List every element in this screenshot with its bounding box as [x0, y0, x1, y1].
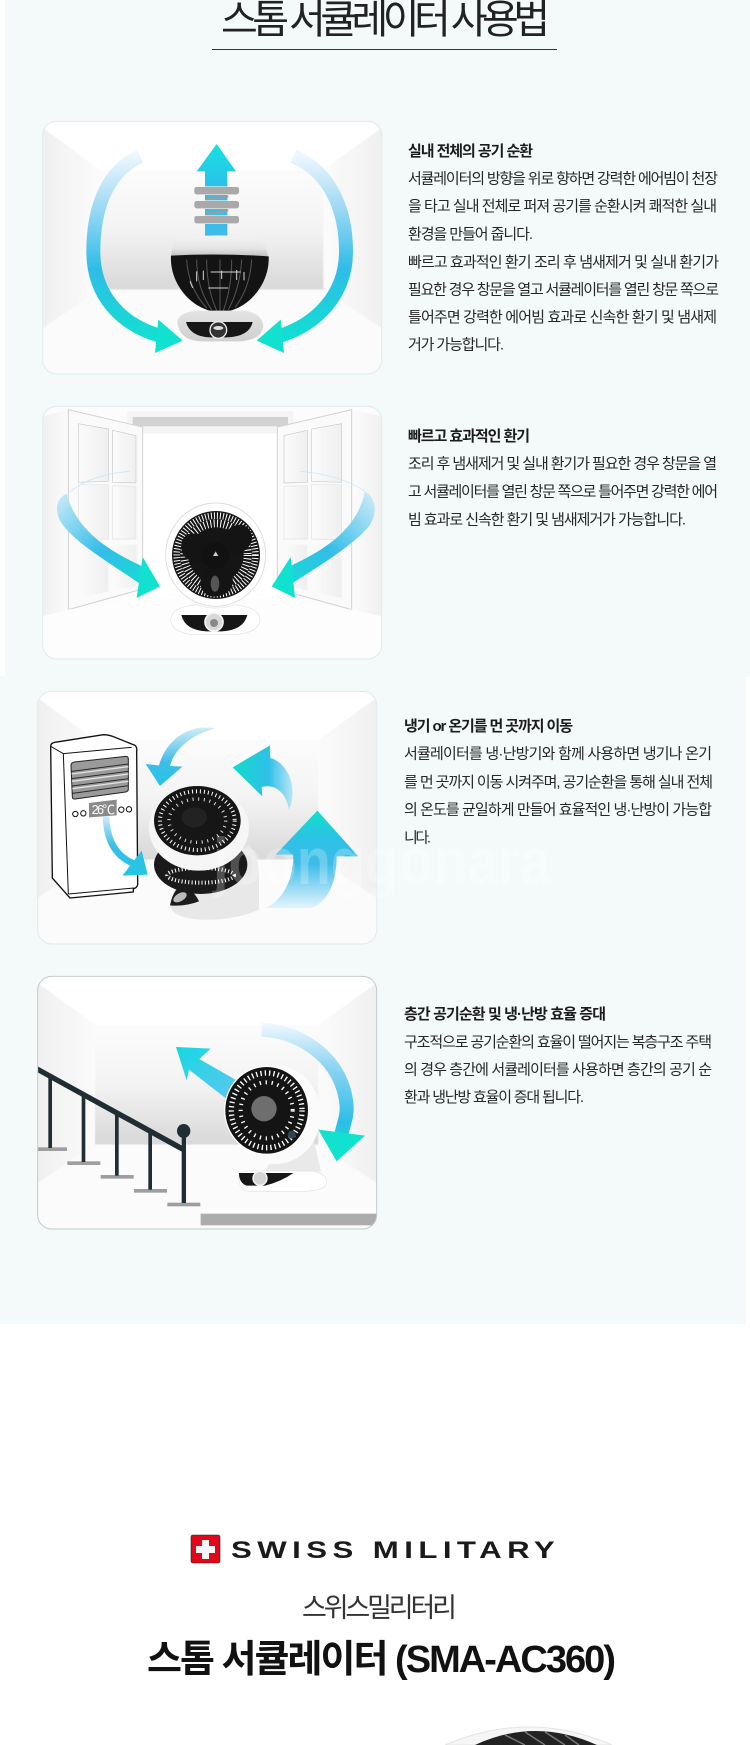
- body text: 빠르고 효과적인 환기 조리 후 냄새제거 및 실내 환기가: [408, 254, 719, 271]
- body text: 빔 효과로 신속한 환기 및 냄새제거가 가능합니다.: [408, 512, 686, 528]
- panel: between floors: [38, 976, 377, 1229]
- arrow: left curved: [93, 156, 183, 353]
- body text: [404, 746, 713, 846]
- brand logo: [191, 1535, 555, 1563]
- heading: 실내 전체의 공기 순환: [408, 143, 533, 160]
- title underline: [212, 49, 557, 50]
- fan: side angle: [224, 1065, 327, 1191]
- arrow: right returning: [233, 745, 293, 810]
- body text: 을 타고 실내 전체로 퍼져 공기를 순환시켜 쾌적한 실내: [408, 198, 717, 215]
- stair railing: [38, 1066, 190, 1203]
- air conditioner unit: [51, 735, 138, 898]
- body text: 거가 가능합니다.: [408, 336, 504, 354]
- heading: 층간 공기순환 및 냉·난방 효율 증대: [404, 1006, 606, 1023]
- panel: moving cool or warm air: [38, 691, 377, 944]
- arrow: left inward: [57, 471, 160, 598]
- body text: 고 서큘레이터를 열린 창문 쪽으로 틀어주면 강력한 에어: [408, 484, 718, 500]
- arrow: top back to unit: [146, 727, 215, 786]
- fan: front facing: [166, 503, 266, 635]
- icon: swiss cross: [191, 1535, 220, 1563]
- window: left casement: [68, 410, 143, 610]
- fan: angled view: [149, 785, 259, 920]
- body text: 서큘레이터를 냉·난방기와 함께 사용하면 냉기나 온기: [404, 746, 712, 762]
- text block: between floors: [404, 1006, 712, 1106]
- heading: 냉기 or 온기를 먼 곳까지 이동: [404, 718, 573, 735]
- body text: 서큘레이터의 방향을 위로 향하면 강력한 에어빔이 천장: [408, 170, 718, 188]
- section background upper: [5, 0, 750, 677]
- heading: 빠르고 효과적인 환기: [408, 428, 530, 445]
- panel: quick ventilation: [43, 406, 382, 659]
- section background lower: [0, 676, 746, 1324]
- body text: 조리 후 냄새제거 및 실내 환기가 필요한 경우 창문을 열: [408, 456, 717, 472]
- brand subtitle: 스위스밀리터리: [302, 1593, 457, 1623]
- air stripes: [194, 187, 239, 224]
- body text: [404, 1034, 712, 1106]
- arrow: up-left: [176, 1047, 237, 1099]
- text block: whole-room circulation: [408, 143, 719, 354]
- body text: [408, 170, 719, 354]
- temperature display: 26℃: [92, 803, 115, 817]
- body text: 를 먼 곳까지 이동 시켜주며, 공기순환을 통해 실내 전체: [404, 774, 713, 791]
- product title: 스톰 서큘레이터 (SMA-AC360): [147, 1639, 616, 1681]
- body text: 틀어주면 강력한 에어빔 효과로 신속한 환기 및 냄새제: [408, 309, 717, 326]
- text block: moving cool or warm air: [404, 718, 713, 846]
- brand name: SWISS MILITARY: [231, 1536, 555, 1563]
- body text: 의 온도를 균일하게 만들어 효율적인 냉·난방이 가능합: [404, 802, 712, 818]
- arrow: right inward: [272, 471, 375, 598]
- body text: 의 경우 층간에 서큘레이터를 사용하면 층간의 공기 순: [404, 1062, 712, 1078]
- arrow: from unit to fan: [106, 816, 148, 876]
- window lintel: [132, 417, 288, 433]
- arrow: up: [197, 144, 236, 236]
- body text: 필요한 경우 창문을 열고 서큘레이터를 열린 창문 쪽으로: [408, 282, 719, 298]
- product fan top edge: [445, 1727, 612, 1745]
- panel: whole-room circulation: [43, 121, 382, 374]
- text block: quick ventilation: [408, 428, 718, 528]
- body text: 환과 냉난방 효율이 증대 됩니다.: [404, 1089, 584, 1106]
- vent grille: [71, 756, 128, 799]
- fan: upward tilted: [171, 235, 269, 341]
- arrow: large upward: [265, 811, 358, 908]
- watermark: joonggonara: [211, 824, 552, 898]
- temperature display: [89, 800, 117, 817]
- body text: 구조적으로 공기순환의 효율이 떨어지는 복층구조 주택: [404, 1034, 712, 1051]
- arrow: right curved down: [262, 1030, 365, 1161]
- stair steps: [38, 1147, 200, 1206]
- body text: 환경을 만들어 줍니다.: [408, 226, 533, 243]
- body text: [408, 456, 718, 528]
- unit buttons: [73, 807, 132, 817]
- window: right casement: [277, 410, 352, 610]
- body text: 니다.: [404, 830, 431, 846]
- arrow: right curved: [257, 156, 346, 353]
